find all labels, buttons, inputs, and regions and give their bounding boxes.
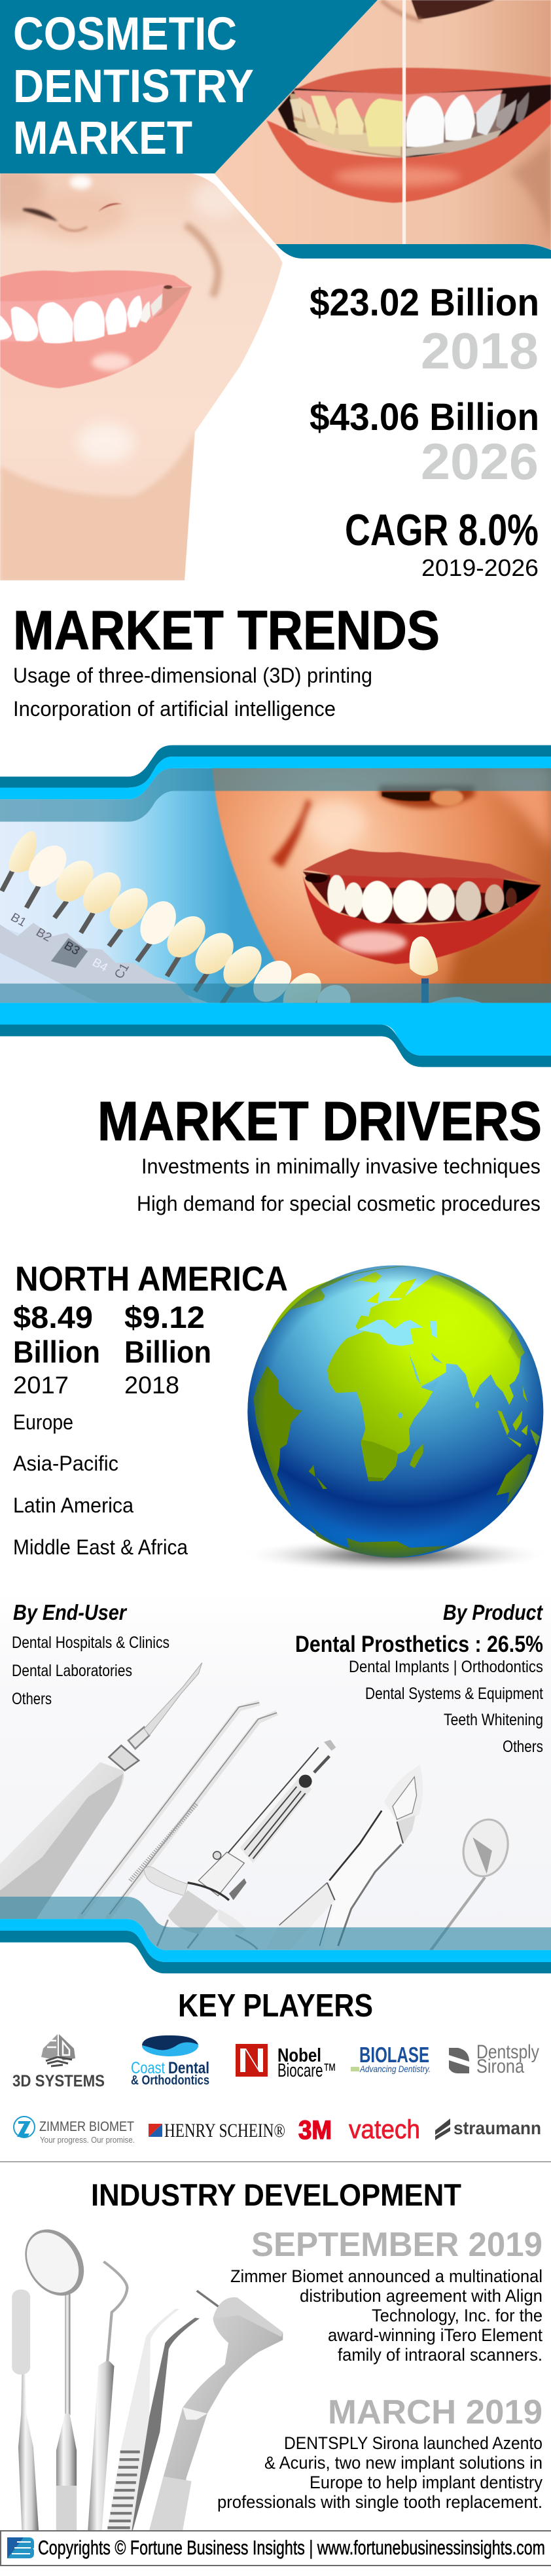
heading: key players: KEY PLAYERS bbox=[178, 1988, 373, 2024]
footer: copyright bar bbox=[1, 2531, 551, 2566]
heading: industry development: INDUSTRY DEVELOPMENT bbox=[91, 2177, 461, 2212]
logo: dentsply sirona: Dentsply bbox=[476, 2041, 539, 2063]
banner: veneer shade guide photo bbox=[0, 745, 551, 1067]
dental instruments illustration bbox=[12, 2222, 283, 2530]
market size statistics: $23.02 Billion bbox=[310, 281, 539, 324]
instrument: probes bbox=[79, 1703, 277, 1919]
segment: by end-user bbox=[12, 1600, 169, 1708]
logo: henry schein: HENRY SCHEIN® bbox=[164, 2120, 285, 2141]
segment: by end-user: Dental Laboratories bbox=[12, 1662, 132, 1680]
market size statistics: 2019-2026 bbox=[421, 554, 539, 581]
photo: smiling woman bbox=[0, 164, 288, 582]
mouth interior bbox=[302, 872, 541, 925]
veneer on stem bbox=[410, 937, 484, 1003]
bottom wave of instruments panel bbox=[0, 1897, 551, 1973]
market drivers list: High demand for special cosmetic procedures bbox=[137, 1192, 541, 1215]
stems bbox=[2, 871, 234, 1005]
title text: DENTISTRY bbox=[13, 61, 254, 113]
regional panel: north america: $9.12 bbox=[124, 1300, 205, 1334]
segment: by end-user: By End-User bbox=[13, 1600, 128, 1624]
logo: coast dental: & Orthodontics bbox=[131, 2073, 209, 2088]
instrument: elevator bbox=[0, 1662, 202, 1921]
instrument: extraction forceps bbox=[266, 1765, 423, 1949]
regional panel: north america: 2017 bbox=[13, 1372, 69, 1399]
segment: by end-user: Dental Hospitals & Clinics bbox=[12, 1634, 169, 1652]
logo: biolase bbox=[351, 2043, 431, 2074]
logos: key players bbox=[12, 2034, 541, 2145]
segment: by product: Others bbox=[503, 1738, 543, 1756]
shade tabs bbox=[9, 831, 357, 1024]
instrument: explorer probe bbox=[88, 2262, 127, 2530]
heading: market trends: MARKET TRENDS bbox=[13, 599, 440, 661]
divider line bbox=[402, 0, 406, 244]
market size statistics: $43.06 Billion bbox=[310, 396, 539, 438]
instrument: mouth mirror bbox=[431, 1816, 513, 1951]
other regions list: Asia-Pacific bbox=[13, 1452, 118, 1475]
lips bbox=[302, 849, 541, 884]
instrument: mirror bbox=[14, 2222, 95, 2530]
lips bbox=[297, 67, 551, 95]
tray labels: B4 bbox=[90, 955, 111, 974]
logo: zimmer biomet: ZIMMER BIOMET bbox=[39, 2119, 134, 2134]
market size statistics: 2026 bbox=[421, 433, 539, 490]
photo: teeth whitening before and after bbox=[211, 0, 551, 252]
development: september 2019: Technology, Inc. for the bbox=[372, 2306, 542, 2325]
gums bbox=[293, 90, 503, 116]
logo: dentsply sirona bbox=[449, 2041, 539, 2077]
icon: globe bbox=[241, 1265, 550, 1573]
market size statistics: 2018 bbox=[421, 322, 539, 380]
logo: biolase: Advancing Dentistry. bbox=[359, 2064, 431, 2074]
logo: 3d systems bbox=[12, 2034, 105, 2090]
regional panel: north america bbox=[13, 1260, 288, 1399]
icon: fortune business insights logo bbox=[7, 2537, 34, 2558]
logo: straumann: straumann bbox=[453, 2118, 541, 2138]
logo: coast dental: Coast bbox=[131, 2059, 165, 2077]
title text bbox=[13, 9, 254, 164]
regional panel: north america: 2018 bbox=[124, 1372, 179, 1399]
regional panel: north america: Billion bbox=[13, 1334, 100, 1369]
market size statistics bbox=[310, 281, 539, 581]
panel: dental instruments photo bbox=[0, 1662, 551, 1974]
banner bands bbox=[0, 745, 551, 1067]
development: september 2019: SEPTEMBER 2019 bbox=[251, 2226, 542, 2264]
development: march 2019: Europe to help implant dentistry bbox=[310, 2473, 542, 2492]
logo: coast dental bbox=[131, 2035, 209, 2088]
tray labels: B2 bbox=[34, 925, 54, 944]
segment: by product bbox=[295, 1600, 544, 1756]
market drivers list: Investments in minimally invasive techniques bbox=[141, 1154, 541, 1178]
instrument: syringe bbox=[144, 1740, 336, 1949]
instrument: tweezers bbox=[107, 2308, 200, 2530]
development: march 2019: & Acuris, two new implant solutions in bbox=[264, 2453, 542, 2473]
market trends list: Incorporation of artificial intelligence bbox=[13, 697, 336, 721]
banner backdrop bbox=[0, 766, 551, 1007]
lower teeth bbox=[293, 120, 400, 156]
market trends list: Usage of three-dimensional (3D) printing bbox=[13, 664, 372, 687]
regional panel: north america: $8.49 bbox=[13, 1300, 93, 1334]
logo: 3d systems: 3D SYSTEMS bbox=[12, 2072, 105, 2090]
tray labels: B1 bbox=[9, 910, 29, 929]
development: september 2019: distribution agreement with Align bbox=[300, 2286, 542, 2306]
logo: biolase: BIOLASE bbox=[359, 2043, 429, 2067]
development: september 2019 bbox=[230, 2226, 542, 2365]
market trends list bbox=[13, 664, 372, 721]
tray labels bbox=[10, 912, 130, 978]
development: march 2019: professionals with single tooth replacement. bbox=[217, 2492, 542, 2512]
logo: dentsply sirona: Sirona bbox=[476, 2056, 524, 2077]
development: september 2019: award-winning iTero Element bbox=[328, 2325, 542, 2345]
development: september 2019: family of intraoral scanners. bbox=[338, 2345, 542, 2365]
development: march 2019: MARCH 2019 bbox=[328, 2393, 542, 2431]
upper teeth bbox=[328, 875, 517, 923]
continents bbox=[253, 1265, 540, 1558]
segment: by end-user: Others bbox=[12, 1690, 52, 1708]
shade guide bbox=[0, 831, 357, 1024]
other regions list: Europe bbox=[13, 1410, 73, 1434]
logo: zimmer biomet bbox=[14, 2117, 135, 2145]
upper teeth stained bbox=[290, 96, 402, 147]
market drivers list bbox=[137, 1154, 541, 1215]
title text: COSMETIC bbox=[13, 9, 237, 60]
title text: MARKET bbox=[13, 113, 192, 164]
logo: nobel biocare: Biocare™ bbox=[277, 2060, 336, 2081]
teeth bbox=[0, 293, 162, 344]
tray labels: C1 bbox=[111, 961, 132, 981]
lips bbox=[0, 270, 192, 388]
logo: nobel biocare bbox=[236, 2044, 336, 2081]
regional panel: north america: NORTH AMERICA bbox=[15, 1260, 288, 1298]
logo: zimmer biomet: Your progress. Our promise. bbox=[40, 2136, 135, 2145]
seas bbox=[358, 1320, 443, 1418]
upper teeth white bbox=[406, 92, 529, 147]
logo: coast dental: Dental bbox=[168, 2059, 209, 2077]
other regions list: Latin America bbox=[13, 1494, 133, 1517]
logo: nobel biocare: Nobel bbox=[277, 2045, 321, 2066]
other regions list: Middle East & Africa bbox=[13, 1535, 188, 1559]
other regions list bbox=[13, 1410, 188, 1559]
instrument: spatula bbox=[12, 2289, 39, 2530]
development: march 2019 bbox=[217, 2393, 542, 2512]
logo: vatech: vatech bbox=[349, 2115, 420, 2144]
title banner bbox=[0, 0, 378, 173]
regional panel: north america: Billion bbox=[124, 1334, 211, 1369]
photo: smiling face with veneer bbox=[212, 766, 551, 1003]
instruments backdrop with elevator and probes bbox=[0, 1662, 551, 1950]
tray labels: B3 bbox=[62, 939, 82, 957]
teal accent bar bbox=[276, 244, 551, 259]
logo: 3m: 3M bbox=[298, 2116, 332, 2145]
instrument: scaler bbox=[149, 2291, 283, 2530]
